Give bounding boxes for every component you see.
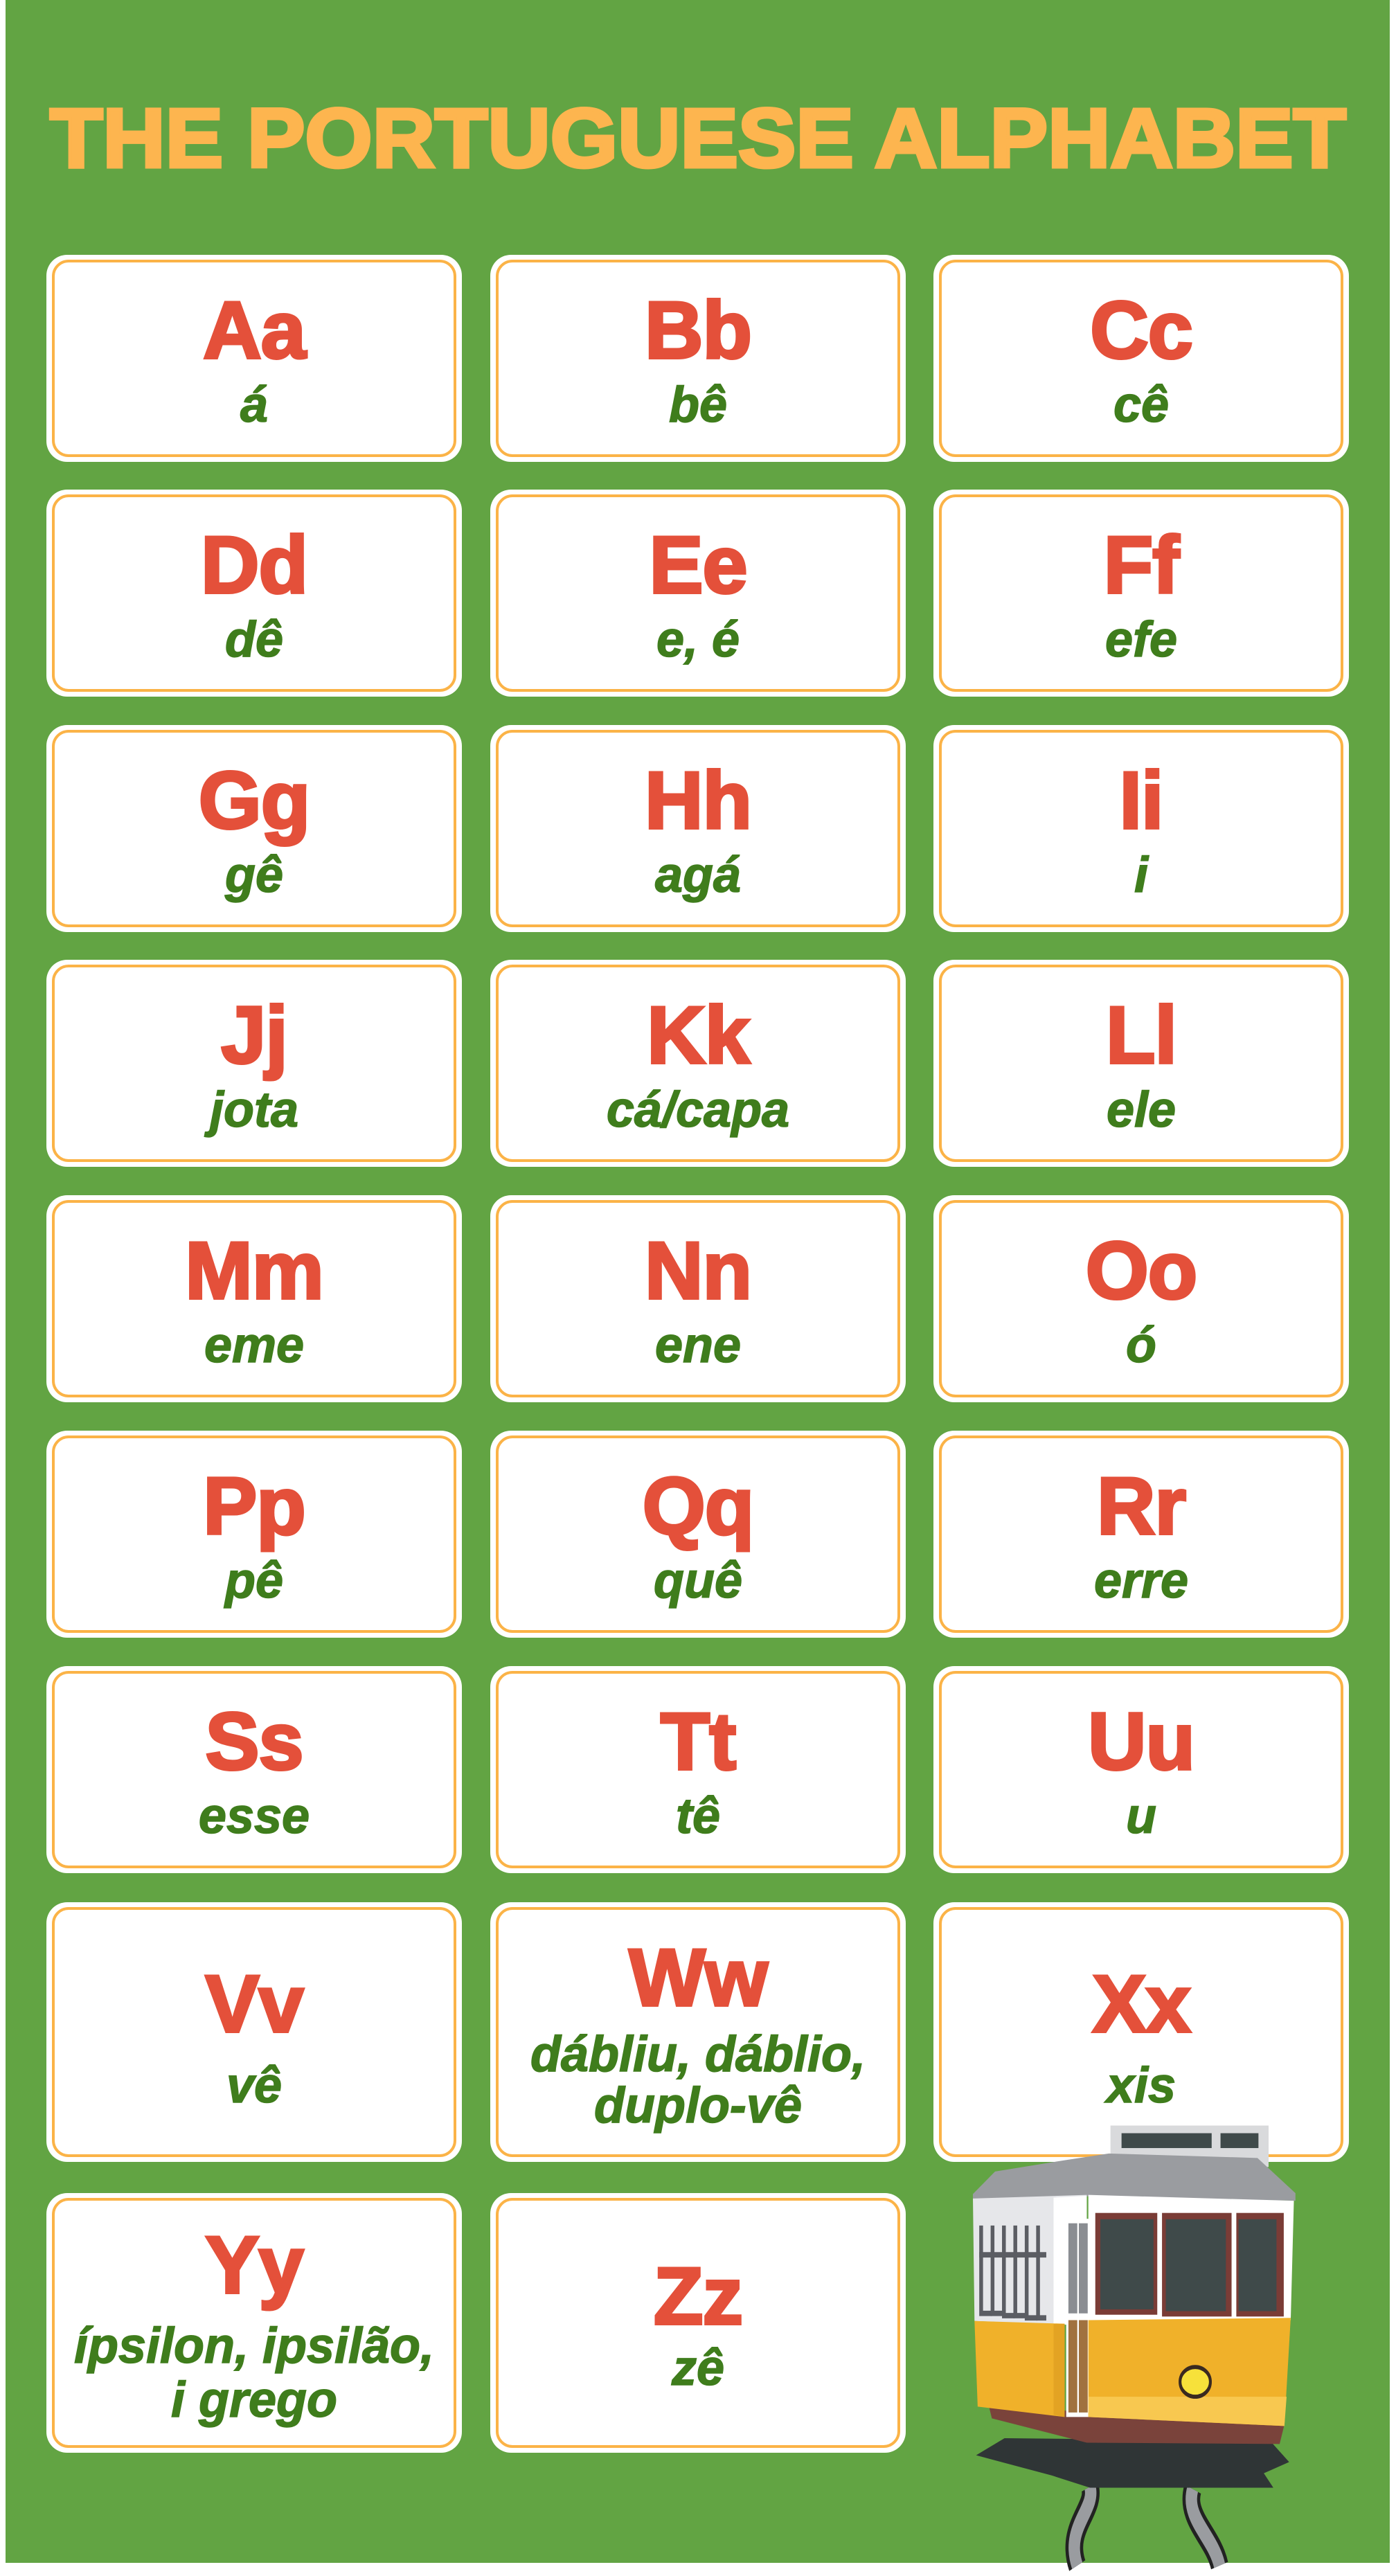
card: Ii: Ii (1119, 755, 1163, 846)
card: Yy: i grego (171, 2372, 337, 2428)
card: Ww: dábliu, dáblio, (530, 2027, 866, 2082)
card: Oo: ó (1126, 1318, 1156, 1373)
card: Ww (490, 1902, 906, 2162)
card: Oo: Oo (1086, 1225, 1197, 1316)
card: Oo (933, 1195, 1349, 1402)
card: Xx: xis (1107, 2058, 1176, 2113)
card: Kk: cá/capa (607, 1082, 789, 1138)
card: Vv: vê (226, 2058, 282, 2113)
card: Cc: cê (1113, 377, 1169, 433)
card: Aa: á (240, 377, 268, 433)
card: Ee: Ee (649, 519, 747, 610)
card: Ww: duplo-vê (594, 2078, 802, 2134)
card: Nn: Nn (645, 1225, 751, 1316)
card: Xx (933, 1902, 1349, 2162)
card: Dd: Dd (201, 519, 307, 610)
card: Cc (933, 255, 1349, 462)
card: Uu: u (1126, 1789, 1156, 1844)
card: Ww: Ww (629, 1932, 767, 2023)
card: Ee (490, 490, 906, 697)
card: Jj: Jj (221, 990, 287, 1080)
card: Aa: Aa (203, 285, 305, 375)
card: Nn: ene (655, 1318, 741, 1373)
card: Gg (46, 725, 462, 932)
card: Ss: esse (199, 1789, 310, 1844)
card: Jj (46, 960, 462, 1167)
card: Ee: e, é (656, 612, 740, 668)
card: Ll: Ll (1106, 990, 1176, 1080)
card: Nn (490, 1195, 906, 1402)
card: Ss (46, 1666, 462, 1873)
card: Hh: agá (655, 848, 741, 903)
card: Ss: Ss (205, 1696, 303, 1787)
illustration: tram (973, 2126, 1296, 2571)
card: Pp: Pp (203, 1460, 305, 1551)
card: Yy: ípsilon, ipsilão, (74, 2318, 434, 2374)
card: Zz: zê (672, 2341, 724, 2396)
card: Ff (933, 490, 1349, 697)
card: Mm (46, 1195, 462, 1402)
card: Bb (490, 255, 906, 462)
card: Bb: bê (669, 377, 727, 433)
card: Zz (490, 2193, 906, 2453)
card: Cc: Cc (1090, 285, 1192, 375)
card: Hh (490, 725, 906, 932)
card: Qq: Qq (643, 1460, 753, 1551)
card: Rr: erre (1094, 1553, 1188, 1609)
card: Kk: Kk (647, 990, 749, 1080)
card: Tt: Tt (661, 1696, 735, 1787)
card: Gg: gê (225, 848, 283, 903)
card: Ll: ele (1107, 1082, 1176, 1138)
card: Dd: dê (225, 612, 283, 668)
card: Ff: efe (1105, 612, 1177, 668)
title: THE PORTUGUESE ALPHABET (50, 91, 1346, 185)
card: Ii (933, 725, 1349, 932)
card: Yy (46, 2193, 462, 2453)
card: Rr (933, 1431, 1349, 1638)
card: Pp: pê (225, 1553, 283, 1609)
card: Bb: Bb (645, 285, 751, 375)
card: Aa (46, 255, 462, 462)
card: Tt (490, 1666, 906, 1873)
card: Uu (933, 1666, 1349, 1873)
card: Qq (490, 1431, 906, 1638)
card: Xx: Xx (1092, 1958, 1190, 2049)
card: Rr: Rr (1097, 1460, 1185, 1551)
card: Uu: Uu (1088, 1696, 1194, 1787)
card: Hh: Hh (645, 755, 751, 846)
card: Mm: eme (204, 1318, 304, 1373)
card: Pp (46, 1431, 462, 1638)
card: Kk (490, 960, 906, 1167)
card: Ii: i (1134, 848, 1148, 903)
card: Yy: Yy (205, 2219, 303, 2310)
card: Vv: Vv (205, 1958, 303, 2049)
card: Dd (46, 490, 462, 697)
card: Tt: tê (676, 1789, 720, 1844)
card: Qq: quê (654, 1553, 742, 1609)
card: Vv (46, 1902, 462, 2162)
card: Gg: Gg (199, 755, 310, 846)
card: Ff: Ff (1104, 519, 1179, 610)
card: Ll (933, 960, 1349, 1167)
card: Zz: Zz (654, 2251, 742, 2341)
card: Jj: jota (210, 1082, 298, 1138)
card: Mm: Mm (185, 1225, 323, 1316)
